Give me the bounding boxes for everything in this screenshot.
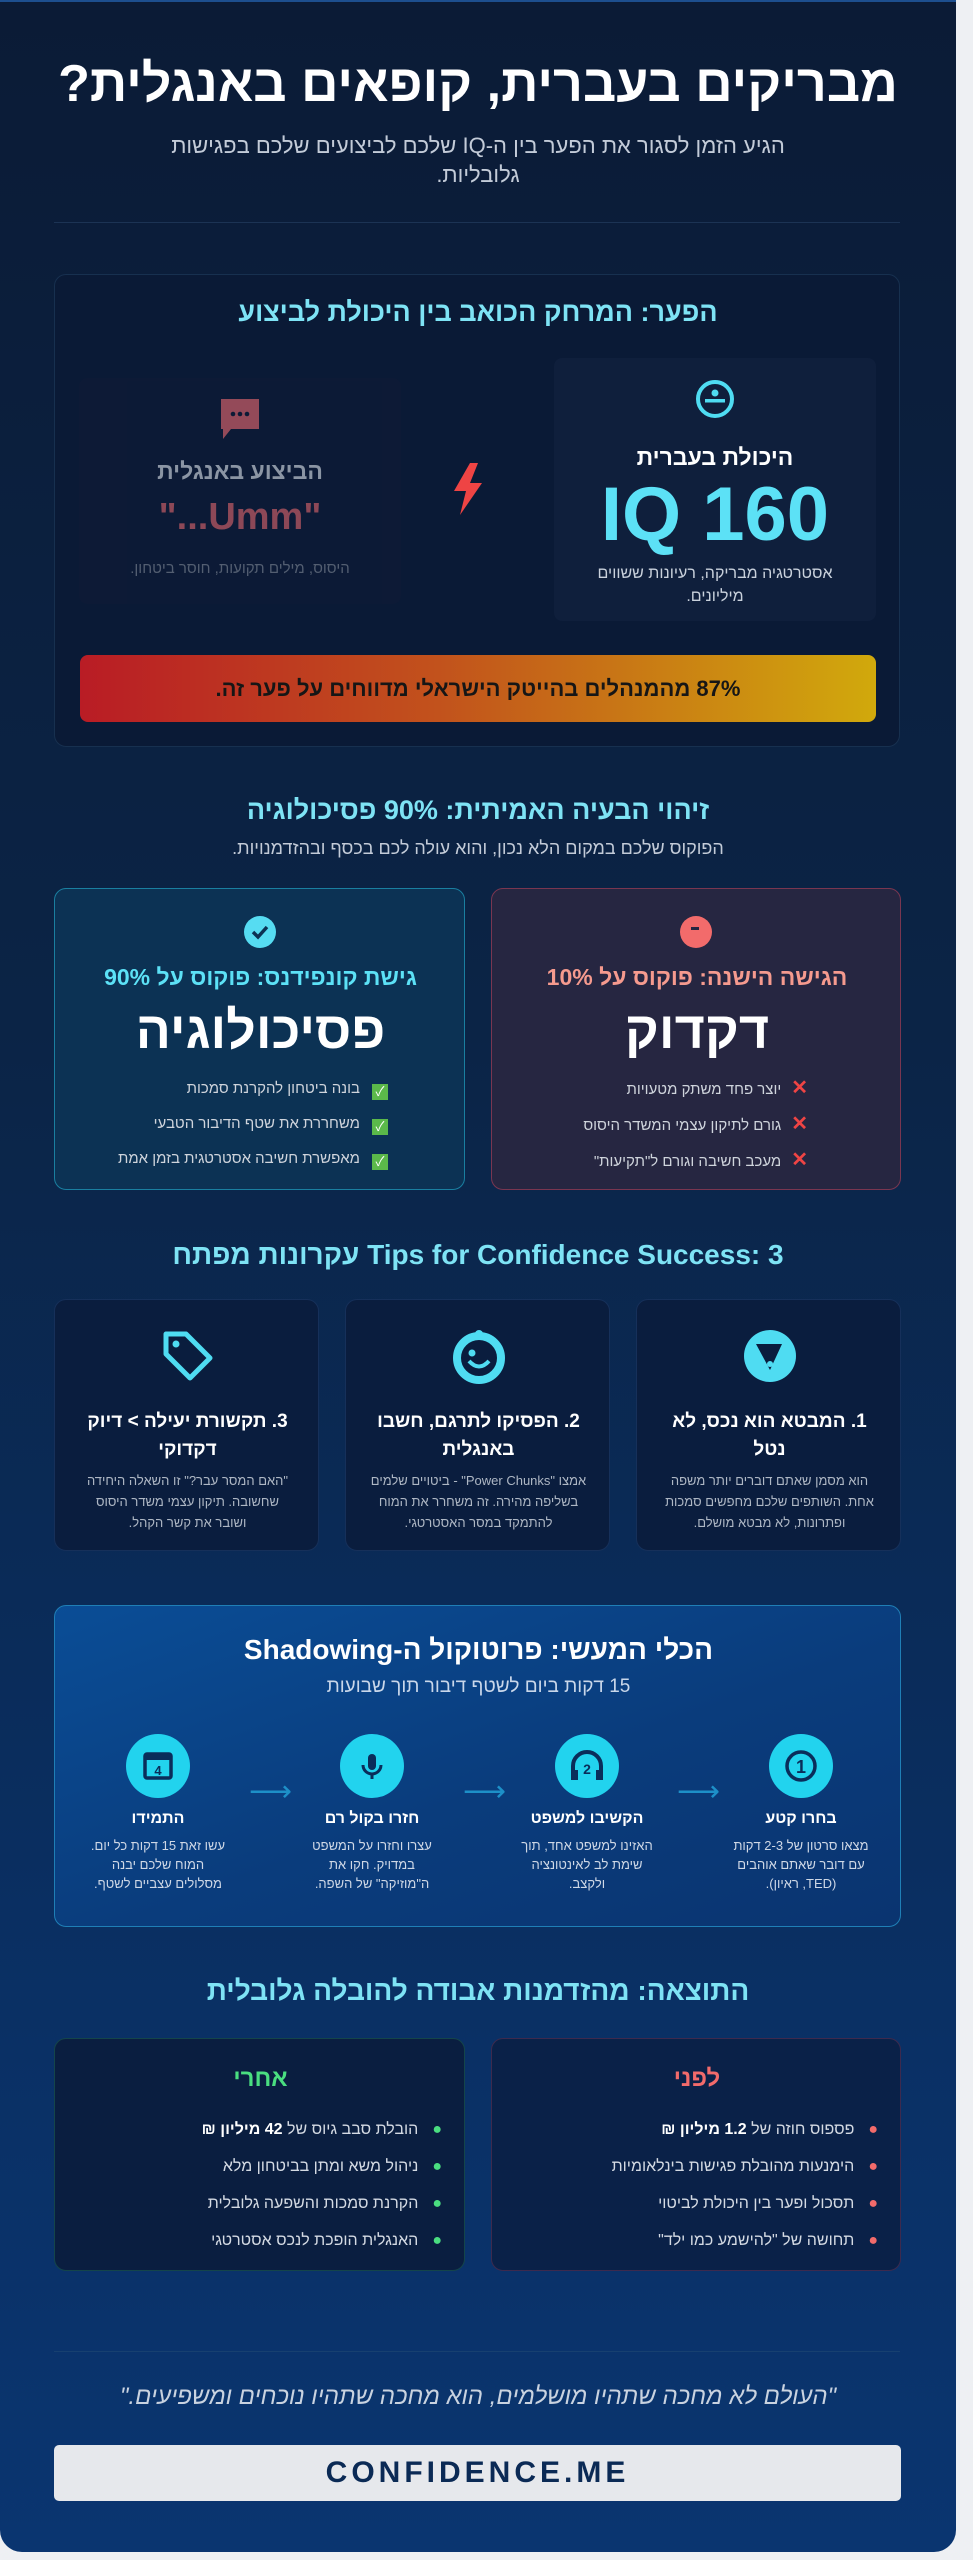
icon: tag <box>164 1332 212 1380</box>
list: מאפשרת חשיבה אסטרטגית בזמן אמת <box>118 1150 360 1167</box>
box: english performance <box>79 378 401 604</box>
arrow: ⟶ <box>249 1775 292 1808</box>
list: ✓ <box>376 1119 384 1134</box>
description: היסוס, מילים תקועות, חוסר ביטחון. <box>130 560 350 577</box>
quote: "העולם לא מחכה שתהיו מושלמים, הוא מחכה שתהיו נוכחים ומשפיעים." <box>120 2383 836 2410</box>
icon: calendar: 4 <box>154 1763 162 1778</box>
list: ●פספוס חוזה של 1.2 מיליון ₪ <box>661 2121 878 2138</box>
icon: lightning <box>454 463 482 515</box>
list: ●הקרנת סמכות והשפעה גלובלית <box>208 2195 442 2212</box>
icon: minus <box>680 916 712 948</box>
section heading: result: התוצאה: מהזדמנות אבודה להובלה גלובלית <box>207 1975 749 2006</box>
icon: speech bubble <box>221 399 259 439</box>
icon: calendar <box>126 1734 190 1798</box>
icon: step 1: 1 <box>796 1757 806 1777</box>
list: ●הימנעות מהובלת פגישות בינלאומיות <box>612 2158 878 2175</box>
label: היכולת בעברית <box>637 444 793 470</box>
tip card 1 <box>636 1299 901 1551</box>
list <box>118 1080 388 1170</box>
big word: דקדוק <box>625 1002 769 1060</box>
description: אסטרטגיה מבריקה, רעיונות ששווים מיליונים. <box>598 565 832 605</box>
card: before <box>491 2038 901 2271</box>
step 2: הקשיבו למשפט <box>531 1810 643 1827</box>
tip card 3 <box>54 1299 319 1551</box>
list: ✕גורם לתיקון עצמי המשדר היסוס <box>583 1113 808 1135</box>
icon: check <box>244 916 276 948</box>
heading: גישת קונפידנס: פוקוס על 90% <box>104 964 417 990</box>
desc: "האם המסר עבר?" זו השאלה היחידה שחשובה. תיקון עצמי משדר היסוס ושובר את קשר הקהל. <box>87 1473 288 1530</box>
card: confidence approach <box>54 888 465 1190</box>
big word: פסיכולוגיה <box>136 1002 385 1060</box>
step 2 <box>521 1734 653 1891</box>
list: ●האנגלית הופכת לנכס אסטרטגי <box>211 2232 442 2249</box>
card: after <box>54 2038 465 2271</box>
list: ●ניהול משא ומתן בביטחון מלא <box>223 2158 442 2175</box>
step 2: האזינו למשפט אחד, תוך שימת לב לאינטונציה ולקצב. <box>521 1838 653 1891</box>
subtitle: הגיע הזמן לסגור את הפער בין ה-IQ שלכם לביצועים שלכם בפגישות גלובליות. <box>171 133 785 187</box>
title: מבריקים בעברית, קופאים באנגלית? <box>58 55 898 113</box>
section heading: tips: עקרונות מפתח Tips for Confidence Success: 3 <box>172 1239 784 1270</box>
brand bar <box>54 2445 901 2501</box>
label: הביצוע באנגלית <box>157 458 323 484</box>
heading: הכלי המעשי: פרוטוקול ה-Shadowing <box>244 1634 713 1665</box>
list <box>612 2121 878 2249</box>
box: hebrew ability <box>554 358 876 621</box>
list: ✕יוצר פחד משתק מטעויות <box>627 1077 808 1099</box>
brand bar: CONFIDENCE.ME <box>326 2456 629 2489</box>
icon: step 1 <box>769 1734 833 1798</box>
icon: headphones <box>555 1734 619 1798</box>
step 1 <box>733 1734 869 1891</box>
list: ✕מעכב חשיבה וגורם ל"תקיעות" <box>594 1149 808 1171</box>
list: ✓ <box>376 1154 384 1169</box>
umm: "...Umm" <box>159 496 321 538</box>
arrow: ⟶ <box>677 1775 720 1808</box>
stat bar: 87% מהמנהלים בהייטק הישראלי מדווחים על פער זה. <box>216 676 740 701</box>
step 1: בחרו קטע <box>765 1810 837 1827</box>
big number: IQ 160 <box>601 472 829 557</box>
title: 1. המבטא הוא נכס, לא נטל <box>672 1411 867 1460</box>
desc: אמצו "Power Chunks" - ביטויים שלמים בשליפה מהירה. זה משחרר את המוח להתמקד במסר האסטרטגי. <box>371 1473 586 1530</box>
heading: לפני <box>674 2065 720 2092</box>
subheading: 15 דקות ביום לשטף דיבור תוך שבועות <box>327 1676 630 1697</box>
panel: the gap <box>54 274 900 747</box>
step 3 <box>312 1734 432 1891</box>
section subtitle: הפוקוס שלכם במקום הלא נכון, והוא עולה לכם בכסף ובהזדמנויות. <box>232 838 724 858</box>
step 4: התמידו <box>132 1810 184 1827</box>
icon: brain circle <box>696 380 734 418</box>
icon: compass <box>744 1330 796 1382</box>
desc: הוא מסמן שאתם דוברים יותר משפה אחת. השותפים שלכם מחפשים סמכות ופתרונות, לא מבטא מושלם. <box>665 1473 874 1530</box>
title: 2. הפסיקו לתרגם, חשבו באנגלית <box>377 1411 580 1460</box>
title: 3. תקשורת יעילה > דיוק דקדוקי <box>87 1411 288 1460</box>
list: ●הובלת סבב גיוס של 42 מיליון ₪ <box>202 2121 442 2138</box>
stat bar <box>80 655 876 722</box>
card: old approach <box>491 888 901 1190</box>
list <box>583 1077 808 1171</box>
step 1: מצאו סרטון של 2-3 דקות עם דובר שאתם אוהבים (TED, ראיון). <box>733 1838 869 1891</box>
section heading: real problem: זיהוי הבעיה האמיתית: 90% פסיכולוגיה <box>247 795 709 825</box>
list: ●תחושה של "להישמע כמו ילד" <box>658 2232 878 2249</box>
list: ●תסכול ופער בין היכולת לביטוי <box>658 2195 878 2212</box>
list: בונה ביטחון להקרנת סמכות <box>187 1080 360 1097</box>
step 3: חזרו בקול רם <box>325 1810 419 1827</box>
list: משחררת את שטף הדיבור הטבעי <box>154 1115 360 1132</box>
list: ✓ <box>376 1084 384 1099</box>
step 4: עשו זאת 15 דקות כל יום. המוח שלכם יבנה מסלולים עצביים לשטף. <box>91 1838 225 1891</box>
icon: face <box>453 1330 505 1384</box>
step 4 <box>91 1734 225 1891</box>
panel heading: הפער: המרחק הכואב בין היכולת לביצוע <box>238 297 718 327</box>
heading: הגישה הישנה: פוקוס על 10% <box>547 964 847 990</box>
icon: microphone <box>340 1734 404 1798</box>
arrow: ⟶ <box>463 1775 506 1808</box>
panel: shadowing protocol <box>54 1605 901 1927</box>
step 3: עצרו וחזרו על המשפט במדויק. חקו את ה"מוזיקה" של השפה. <box>312 1838 432 1891</box>
tip card 2 <box>345 1299 610 1551</box>
icon: headphones: 2 <box>583 1761 591 1777</box>
list <box>202 2121 442 2249</box>
heading: אחרי <box>233 2065 288 2092</box>
